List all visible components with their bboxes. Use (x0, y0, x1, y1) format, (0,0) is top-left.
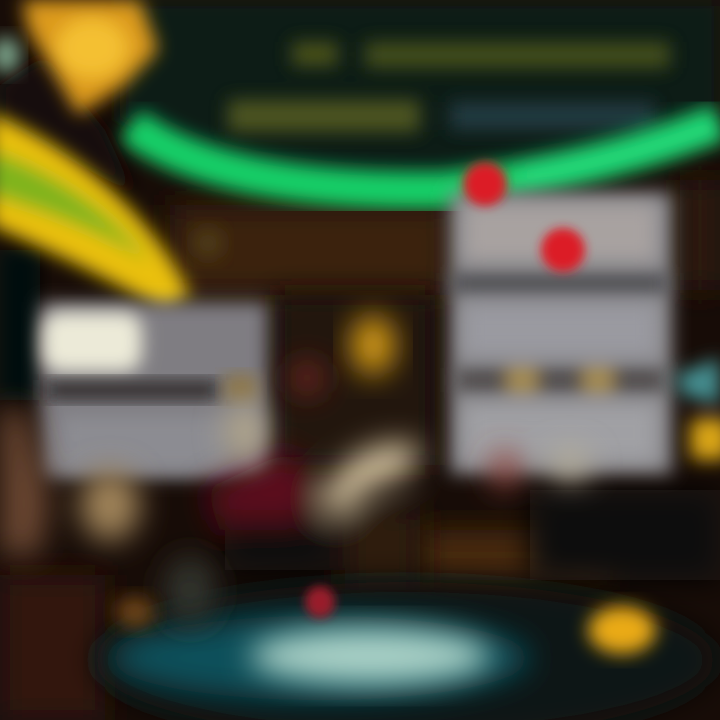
red dot top (463, 162, 507, 206)
top left teal accent (0, 37, 20, 73)
round table rim (95, 582, 715, 720)
panel: right information board (450, 192, 672, 474)
panel rows (452, 205, 668, 460)
small amber wall glow (192, 227, 224, 259)
title placeholder: illegible blurred heading (228, 42, 670, 132)
yellow glow by table (588, 606, 656, 654)
right edge teal and yellow objects (675, 358, 720, 460)
dark green ceiling (120, 0, 720, 186)
red chip on table (305, 586, 335, 618)
amber table edge glow (115, 596, 155, 628)
round table surface (110, 616, 530, 700)
hanging yellow lamp (22, 0, 158, 115)
central yellow lantern (351, 315, 395, 375)
grey figure by table (164, 556, 216, 624)
bottom left figures (0, 402, 590, 555)
central figures (205, 361, 420, 590)
white highlight block (42, 312, 142, 372)
yellow and green banner (0, 112, 190, 312)
panel: left information board (40, 302, 268, 478)
neon green arc (130, 122, 720, 190)
dark row (45, 380, 220, 400)
red dot on panel (541, 228, 585, 272)
dark shadow beneath lamp (0, 55, 135, 195)
table highlight (250, 628, 490, 684)
